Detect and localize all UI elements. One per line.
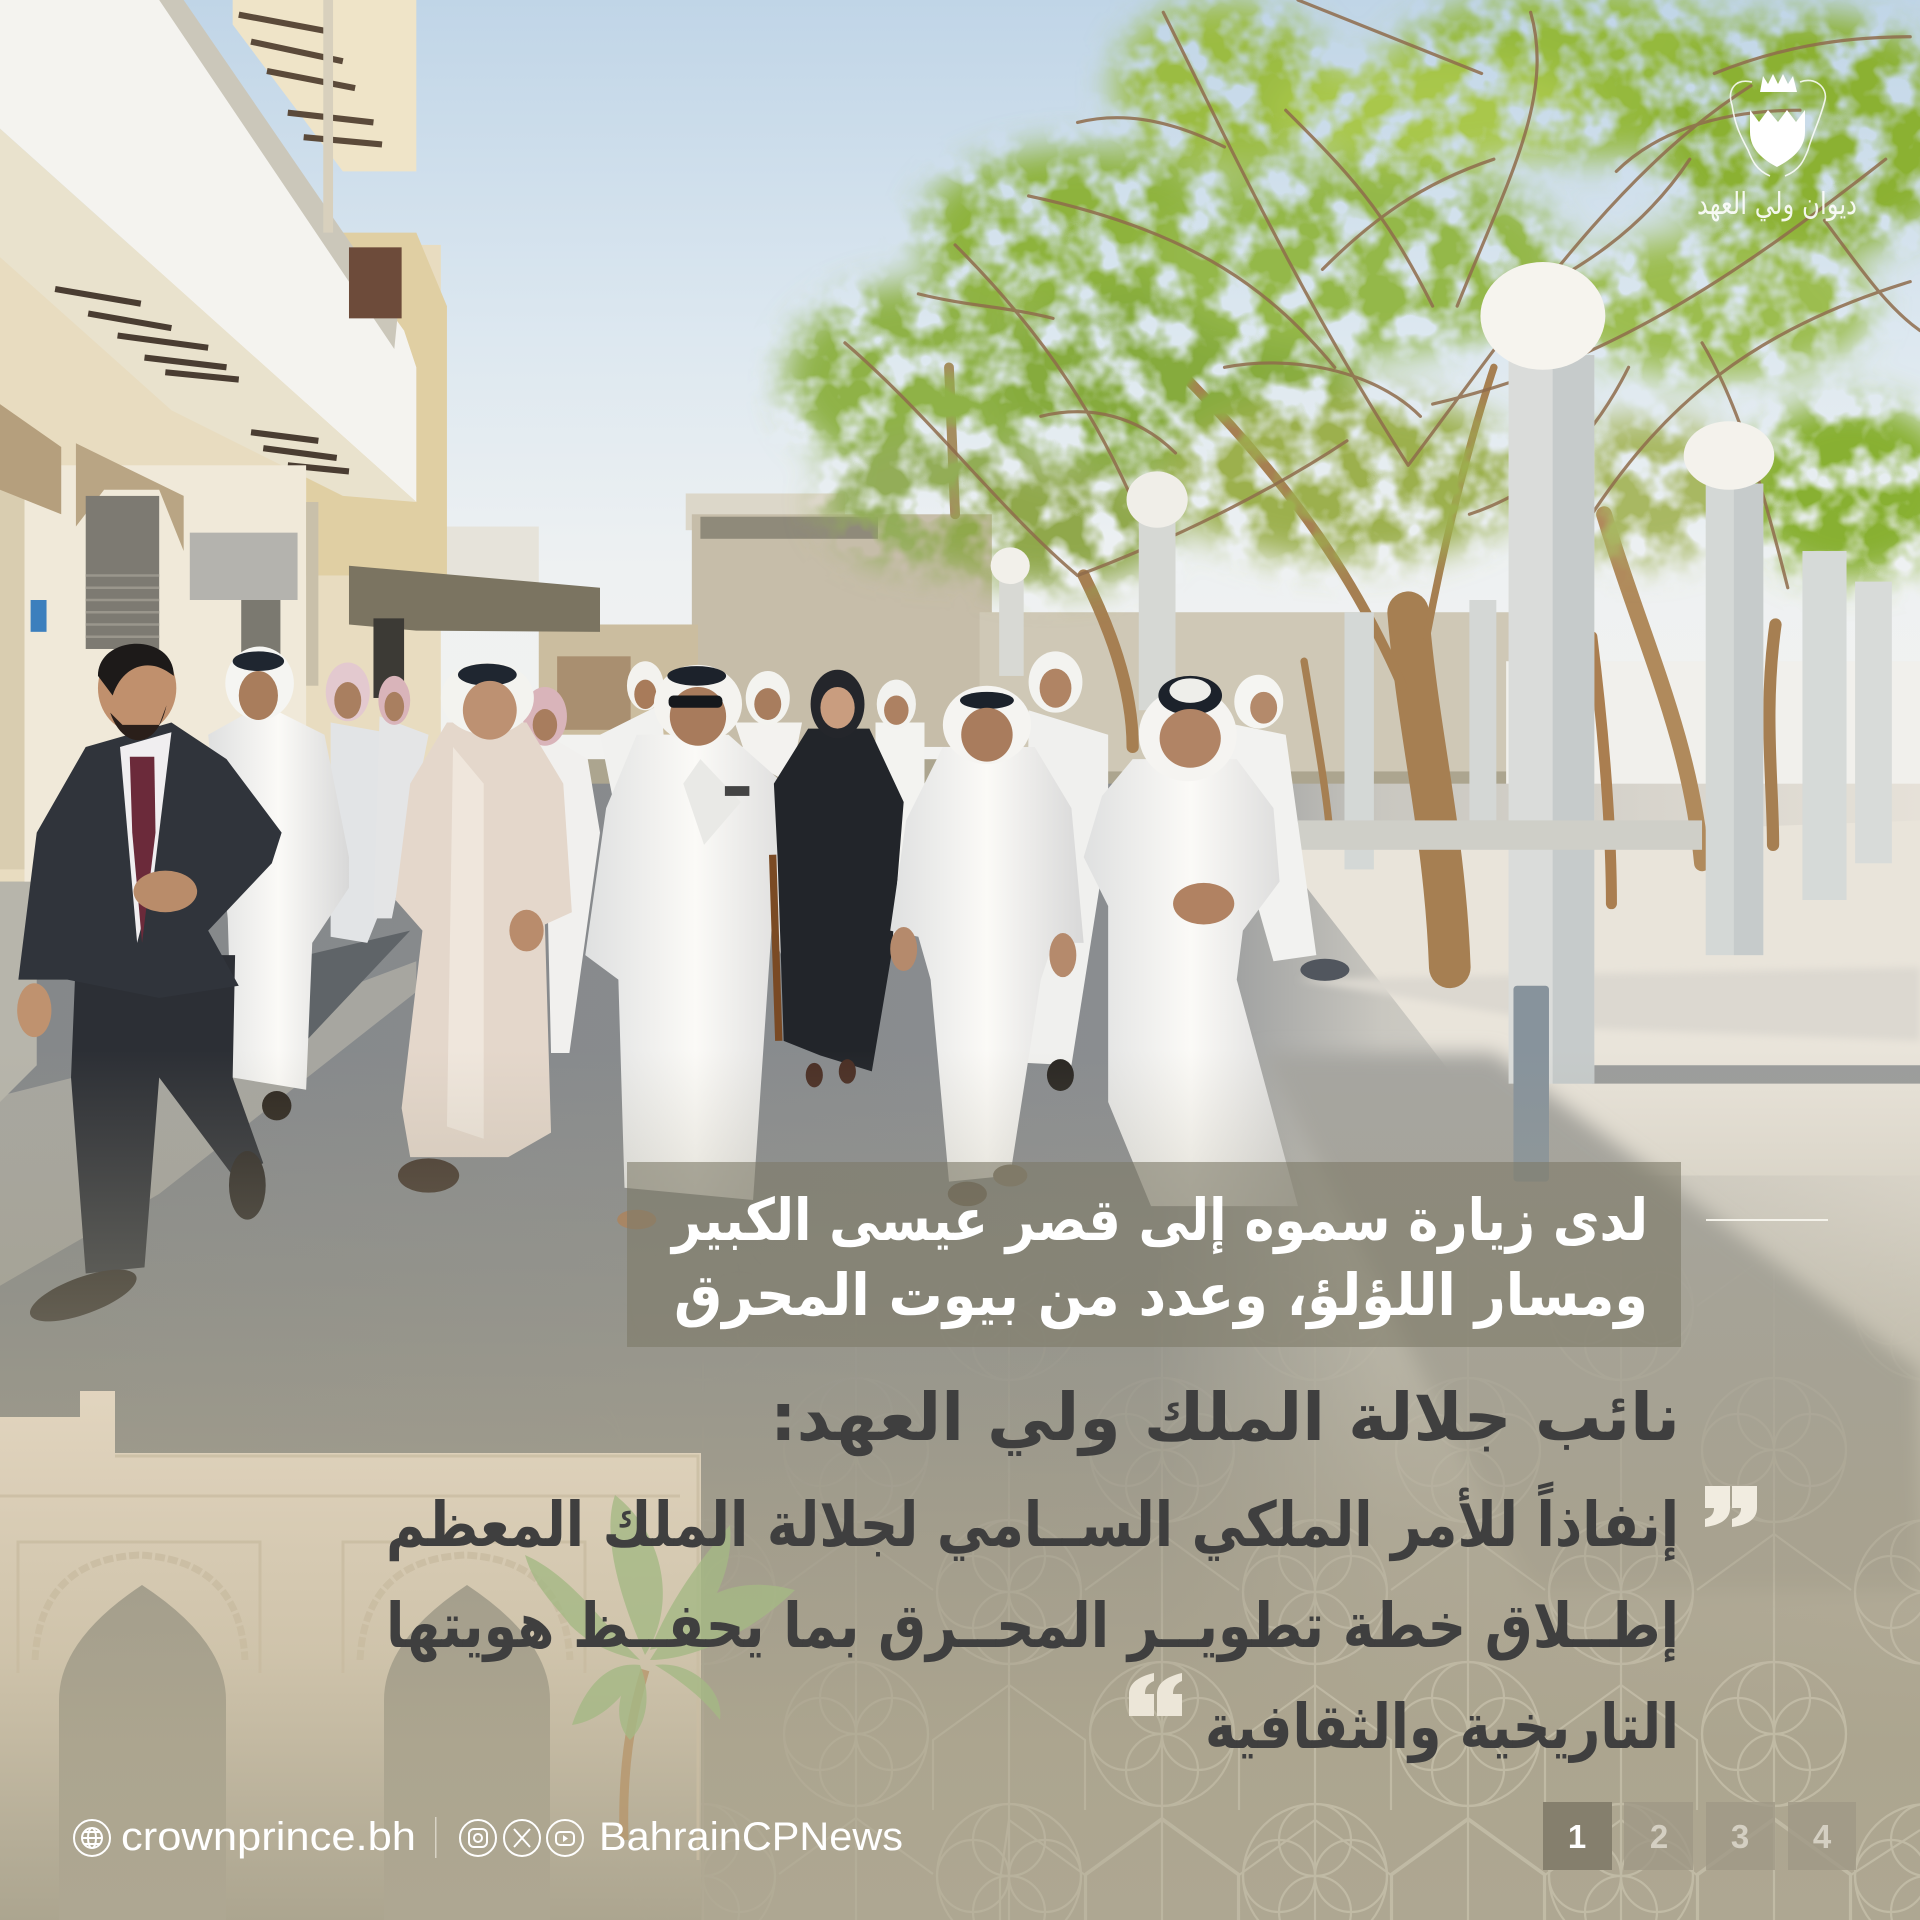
page indicator: 1 (1568, 1818, 1586, 1855)
tree foliage (784, 0, 1920, 588)
opening quotation mark (1129, 1673, 1182, 1716)
page indicator: 2 (1650, 1818, 1668, 1855)
social handle: BahrainCPNews (599, 1815, 903, 1859)
left white building (0, 0, 600, 882)
caption text (669, 1186, 1648, 1330)
group of officials (17, 644, 1349, 1332)
tree trunks (949, 367, 1776, 967)
quotation body (386, 1480, 1679, 1763)
central figure in white thobe (585, 665, 806, 1229)
illustration: traditional building with arches (0, 1391, 701, 1920)
tree branches (845, 0, 1920, 588)
sky (0, 0, 1920, 759)
caption accent line (1706, 1219, 1828, 1221)
heading: نائب جلالة الملك ولي العهد: (770, 1379, 1680, 1457)
background buildings (441, 493, 1920, 845)
website: crownprince.bh (121, 1815, 416, 1859)
man in white thobe, right (1084, 676, 1298, 1206)
caption text: لدى زيارة سموه إلى قصر عيسى الكبير (669, 1186, 1648, 1255)
icon: x (504, 1820, 540, 1856)
woman in black abaya (774, 670, 904, 1087)
fade overlay at base of photo (0, 1050, 1920, 1920)
footer: website and social handles (74, 1815, 903, 1859)
illustration: palm tree (525, 1495, 795, 1840)
quotation body: إنفاذاً للأمر الملكي الســامي لجلالة الملك المعظم (386, 1480, 1679, 1561)
background men (326, 651, 1349, 1065)
geometric lattice pattern (886, 1505, 1920, 1920)
emblem: crown prince court logo: ديوان ولي العهد (1697, 187, 1857, 222)
caption text: ومسار اللؤلؤ، وعدد من بيوت المحرق (674, 1261, 1648, 1330)
page indicator: 3 (1731, 1818, 1749, 1855)
quotation body: التاريخية والثقافية (1205, 1690, 1679, 1763)
man in beige thobe (396, 661, 572, 1193)
man in white thobe, far left (208, 647, 349, 1120)
caption box background (627, 1162, 1681, 1347)
icon: youtube (547, 1820, 583, 1856)
lamp columns (991, 262, 1892, 1182)
quotation body: إطــلاق خطة تطويــر المحــرق بما يحفــظ هويتها (386, 1589, 1679, 1662)
page indicator: 4 (1813, 1818, 1832, 1855)
icon: instagram (460, 1820, 496, 1856)
closing quotation mark (1705, 1486, 1757, 1527)
emblem: crown prince court logo (1697, 74, 1857, 222)
icon: globe (74, 1820, 110, 1856)
ground and pavement (0, 784, 1920, 1920)
man in white thobe, centre right (890, 686, 1084, 1206)
page indicator (1543, 1802, 1856, 1870)
man in dark suit (17, 644, 282, 1332)
